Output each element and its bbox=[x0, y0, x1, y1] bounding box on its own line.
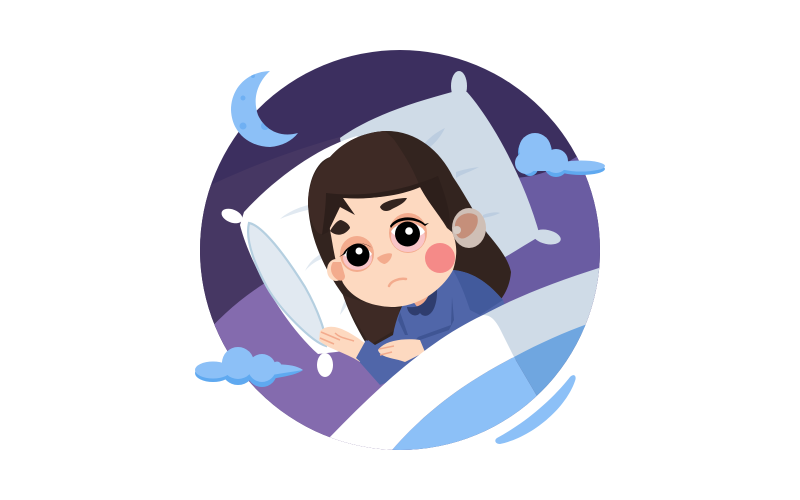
nose bbox=[377, 253, 392, 264]
side hair strand bbox=[420, 176, 450, 228]
left eye bbox=[339, 243, 372, 270]
eye shadows bbox=[340, 213, 427, 272]
cloud right bbox=[515, 133, 605, 177]
cloud right body bbox=[515, 133, 605, 174]
blanket bbox=[330, 268, 600, 450]
eyebrows bbox=[330, 198, 407, 235]
pillow back face bbox=[340, 92, 540, 290]
cloud left bbox=[195, 347, 303, 387]
blanket grey fold bbox=[483, 266, 605, 360]
left ear inner bbox=[331, 262, 345, 281]
right ear inner bbox=[455, 213, 478, 238]
night sky disc bbox=[190, 40, 610, 460]
face bbox=[326, 187, 456, 307]
cloud right shadow bbox=[518, 135, 605, 177]
white tuft bottom bbox=[317, 353, 333, 377]
right hand lines bbox=[379, 346, 394, 355]
back hair bbox=[308, 131, 511, 345]
blush bbox=[425, 243, 455, 273]
hair lighter side bbox=[343, 295, 400, 345]
collar bbox=[407, 288, 437, 316]
illustration: tired girl in bed bbox=[195, 50, 605, 450]
girl bbox=[308, 131, 511, 385]
pillow creases bbox=[425, 128, 500, 218]
pillow seam panel bbox=[248, 223, 326, 346]
cloud left body bbox=[195, 347, 303, 382]
ear lobe bbox=[453, 226, 461, 234]
bang edge shadow bbox=[322, 176, 438, 235]
pillow bbox=[219, 71, 562, 377]
blanket dark blue fold bbox=[514, 324, 586, 396]
right eye bbox=[390, 217, 429, 252]
left hand bbox=[319, 327, 366, 362]
blanket blue bbox=[392, 357, 537, 460]
blanket white bbox=[330, 315, 514, 450]
pillow white face bbox=[240, 136, 410, 354]
pillow tufts bbox=[451, 71, 562, 247]
neck bbox=[412, 292, 432, 308]
eyes bbox=[339, 217, 429, 270]
left hand lines bbox=[320, 332, 354, 344]
moon bbox=[231, 71, 298, 147]
mouth bbox=[389, 279, 406, 286]
pyjama body bbox=[356, 270, 510, 385]
sleeve bbox=[356, 340, 380, 372]
left ear bbox=[327, 259, 345, 281]
front bangs bbox=[308, 131, 438, 234]
white tuft top bbox=[219, 206, 245, 226]
pillow white creases bbox=[280, 203, 350, 315]
swoosh bbox=[495, 375, 576, 444]
bangs shade bbox=[388, 131, 442, 187]
cloud left shadow bbox=[195, 351, 303, 387]
pyjama fold bbox=[398, 297, 454, 342]
right ear bbox=[452, 208, 486, 248]
pyjama shaded side bbox=[453, 270, 503, 315]
moon craters bbox=[240, 74, 269, 130]
right hand bbox=[378, 339, 425, 362]
